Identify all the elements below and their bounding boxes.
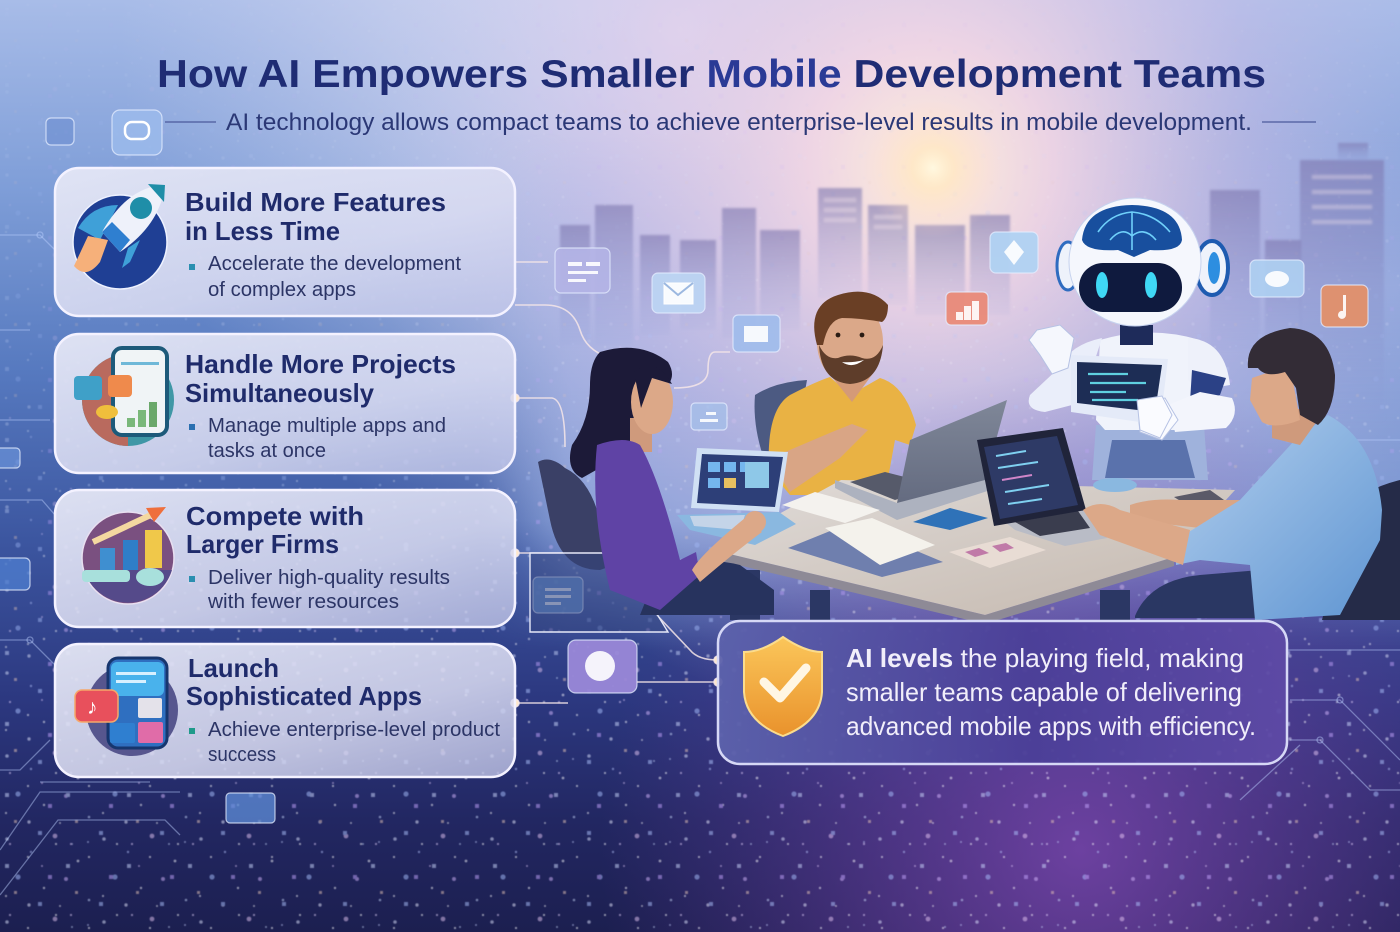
body text: of complex apps	[208, 279, 356, 301]
body text: Deliver high-quality results	[208, 567, 450, 589]
panel: launch sophisticated apps	[55, 644, 515, 777]
table	[713, 480, 1235, 624]
subtitle: AI technology allows compact teams to achieve enterprise-level results in mobile development.	[226, 109, 1252, 136]
man in yellow	[769, 292, 916, 495]
body text: Manage multiple apps and	[208, 415, 446, 437]
callout	[718, 621, 1287, 764]
bullet	[189, 264, 195, 270]
woman	[570, 348, 774, 615]
icon: rocket	[73, 184, 167, 289]
bullet	[189, 728, 195, 734]
bullet	[189, 424, 195, 430]
heading: Launch	[188, 653, 279, 683]
title: How AI Empowers Smaller Mobile Development Teams	[157, 53, 1266, 96]
heading: Simultaneously	[185, 378, 375, 408]
bullet	[189, 576, 195, 582]
callout text: smaller teams capable of delivering	[846, 677, 1242, 707]
circuit lines	[0, 232, 1400, 895]
woman chair	[538, 460, 614, 570]
body text: success	[208, 744, 276, 766]
robot	[1029, 198, 1235, 480]
scene: team meeting with robot	[530, 198, 1400, 632]
panel: build more features	[55, 168, 515, 316]
laptop center	[835, 400, 1007, 520]
floating app icons	[0, 110, 1368, 823]
panel: compete with larger firms	[55, 490, 515, 627]
panel: handle more projects	[55, 334, 515, 473]
connector lines	[511, 262, 730, 707]
icon: phone with charts	[74, 348, 174, 446]
heading: Compete with	[186, 501, 364, 531]
icon: phone with app tiles	[75, 658, 178, 756]
heading: Larger Firms	[186, 529, 339, 559]
body text: tasks at once	[208, 440, 326, 462]
tablet left	[677, 448, 796, 545]
callout text: advanced mobile apps with efficiency.	[846, 711, 1256, 741]
body text: Accelerate the development	[208, 253, 461, 275]
body text: Achieve enterprise-level product	[208, 719, 500, 741]
heading: in Less Time	[185, 216, 340, 246]
laptop with code	[977, 428, 1107, 546]
heading: Sophisticated Apps	[186, 681, 422, 711]
body text: with fewer resources	[207, 591, 399, 613]
city skyline	[560, 143, 1384, 420]
callout text: AI levels the playing field, making	[846, 643, 1239, 673]
man chair	[755, 380, 807, 470]
lower left panel	[530, 553, 668, 632]
table items	[782, 478, 1224, 577]
sun glow	[863, 98, 1003, 238]
heading: Handle More Projects	[185, 349, 456, 379]
icon: shield with check	[744, 637, 822, 736]
icon: growth bars	[82, 507, 174, 604]
icon: phone with app tiles: ♪	[87, 696, 98, 719]
man in blue	[1083, 328, 1400, 620]
heading: Build More Features	[185, 187, 446, 217]
